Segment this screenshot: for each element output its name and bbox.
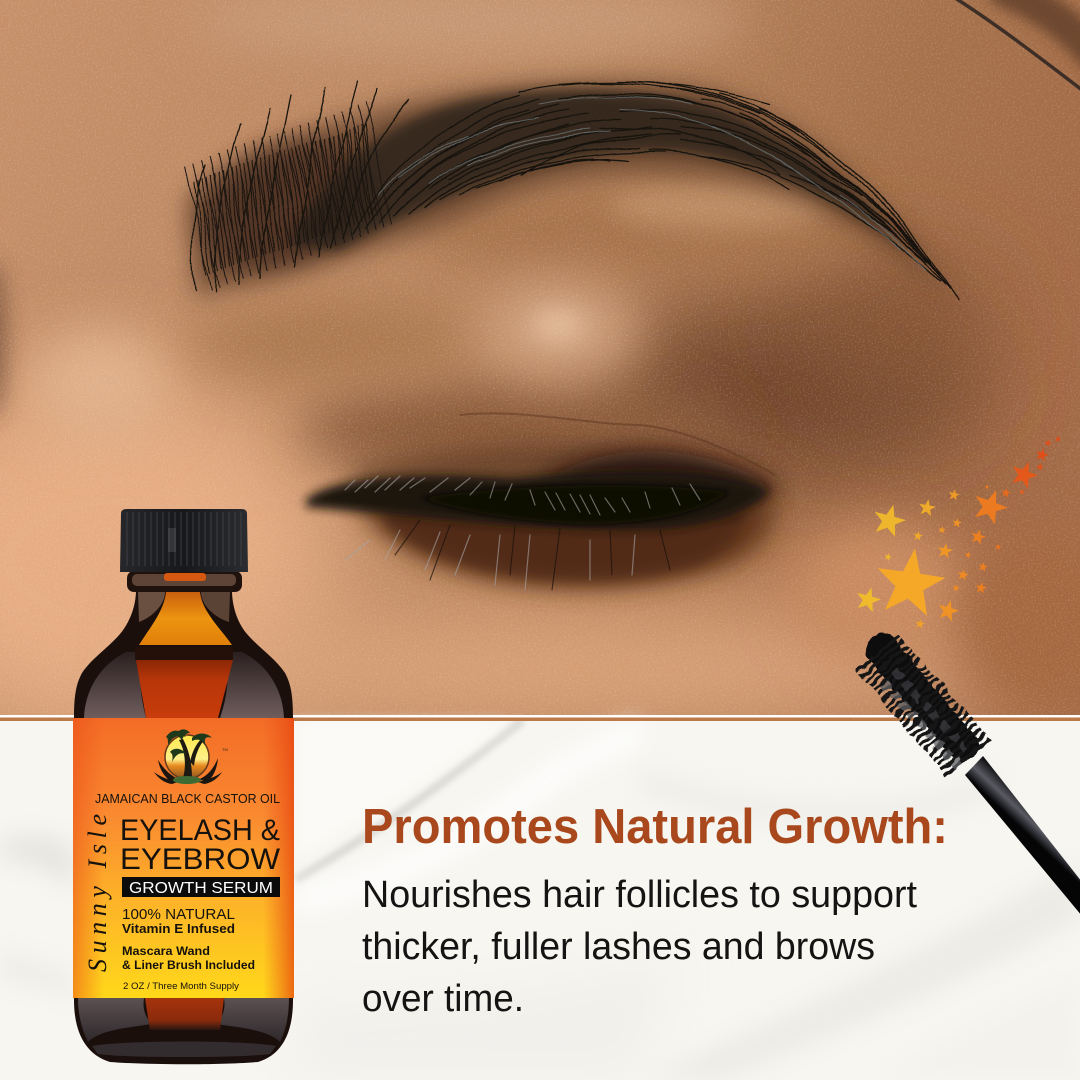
logo: palm tree sunset: TM: [222, 747, 228, 752]
top right hair strand: [952, 0, 1080, 90]
wand handle: [965, 756, 1080, 916]
label text: & Liner Brush Included: [122, 960, 255, 972]
label text: Mascara Wand: [122, 946, 210, 958]
skin lighting and shading: [0, 0, 1080, 740]
label text: JAMAICAN BLACK CASTOR OIL: [95, 791, 280, 806]
brand signature: Sunny Isle: [83, 814, 112, 972]
bottle neck ring: [127, 571, 242, 592]
label text: 100% NATURAL: [122, 906, 235, 923]
logo: palm tree sunset: [154, 729, 228, 784]
divider: white and copper band: [0, 715, 1080, 721]
body copy: thicker, fuller lashes and brows: [362, 926, 875, 968]
label text: EYEBROW: [120, 843, 281, 876]
growth serum banner: GROWTH SERUM: [129, 880, 273, 897]
eyebrow: [180, 80, 958, 300]
label text: Vitamin E Infused: [122, 921, 235, 936]
body copy: [362, 874, 917, 1020]
product bottle: [73, 509, 294, 1064]
mascara wand: [877, 650, 1080, 916]
wand bristles: [877, 650, 970, 768]
label text: [95, 791, 281, 992]
label text: 2 OZ / Three Month Supply: [123, 981, 239, 992]
lower panel: silky cream background: [0, 716, 1080, 1080]
glass highlights: [84, 652, 146, 718]
glass body: [74, 590, 293, 1064]
skin texture: [0, 0, 1080, 716]
orange label: [73, 718, 294, 998]
body copy: Nourishes hair follicles to support: [362, 874, 917, 916]
closed eye with eyelashes: [306, 413, 780, 590]
photo: close-up of closed eye and brow: [0, 0, 1080, 740]
glass base: [78, 998, 152, 1042]
stars: sparkle trail: [853, 435, 1062, 629]
amber oil in neck: [139, 592, 232, 645]
label text: EYELASH &: [120, 814, 280, 847]
black ribbed cap: [120, 509, 248, 572]
body copy: over time.: [362, 978, 524, 1020]
headline: Promotes Natural Growth:: [362, 800, 948, 854]
